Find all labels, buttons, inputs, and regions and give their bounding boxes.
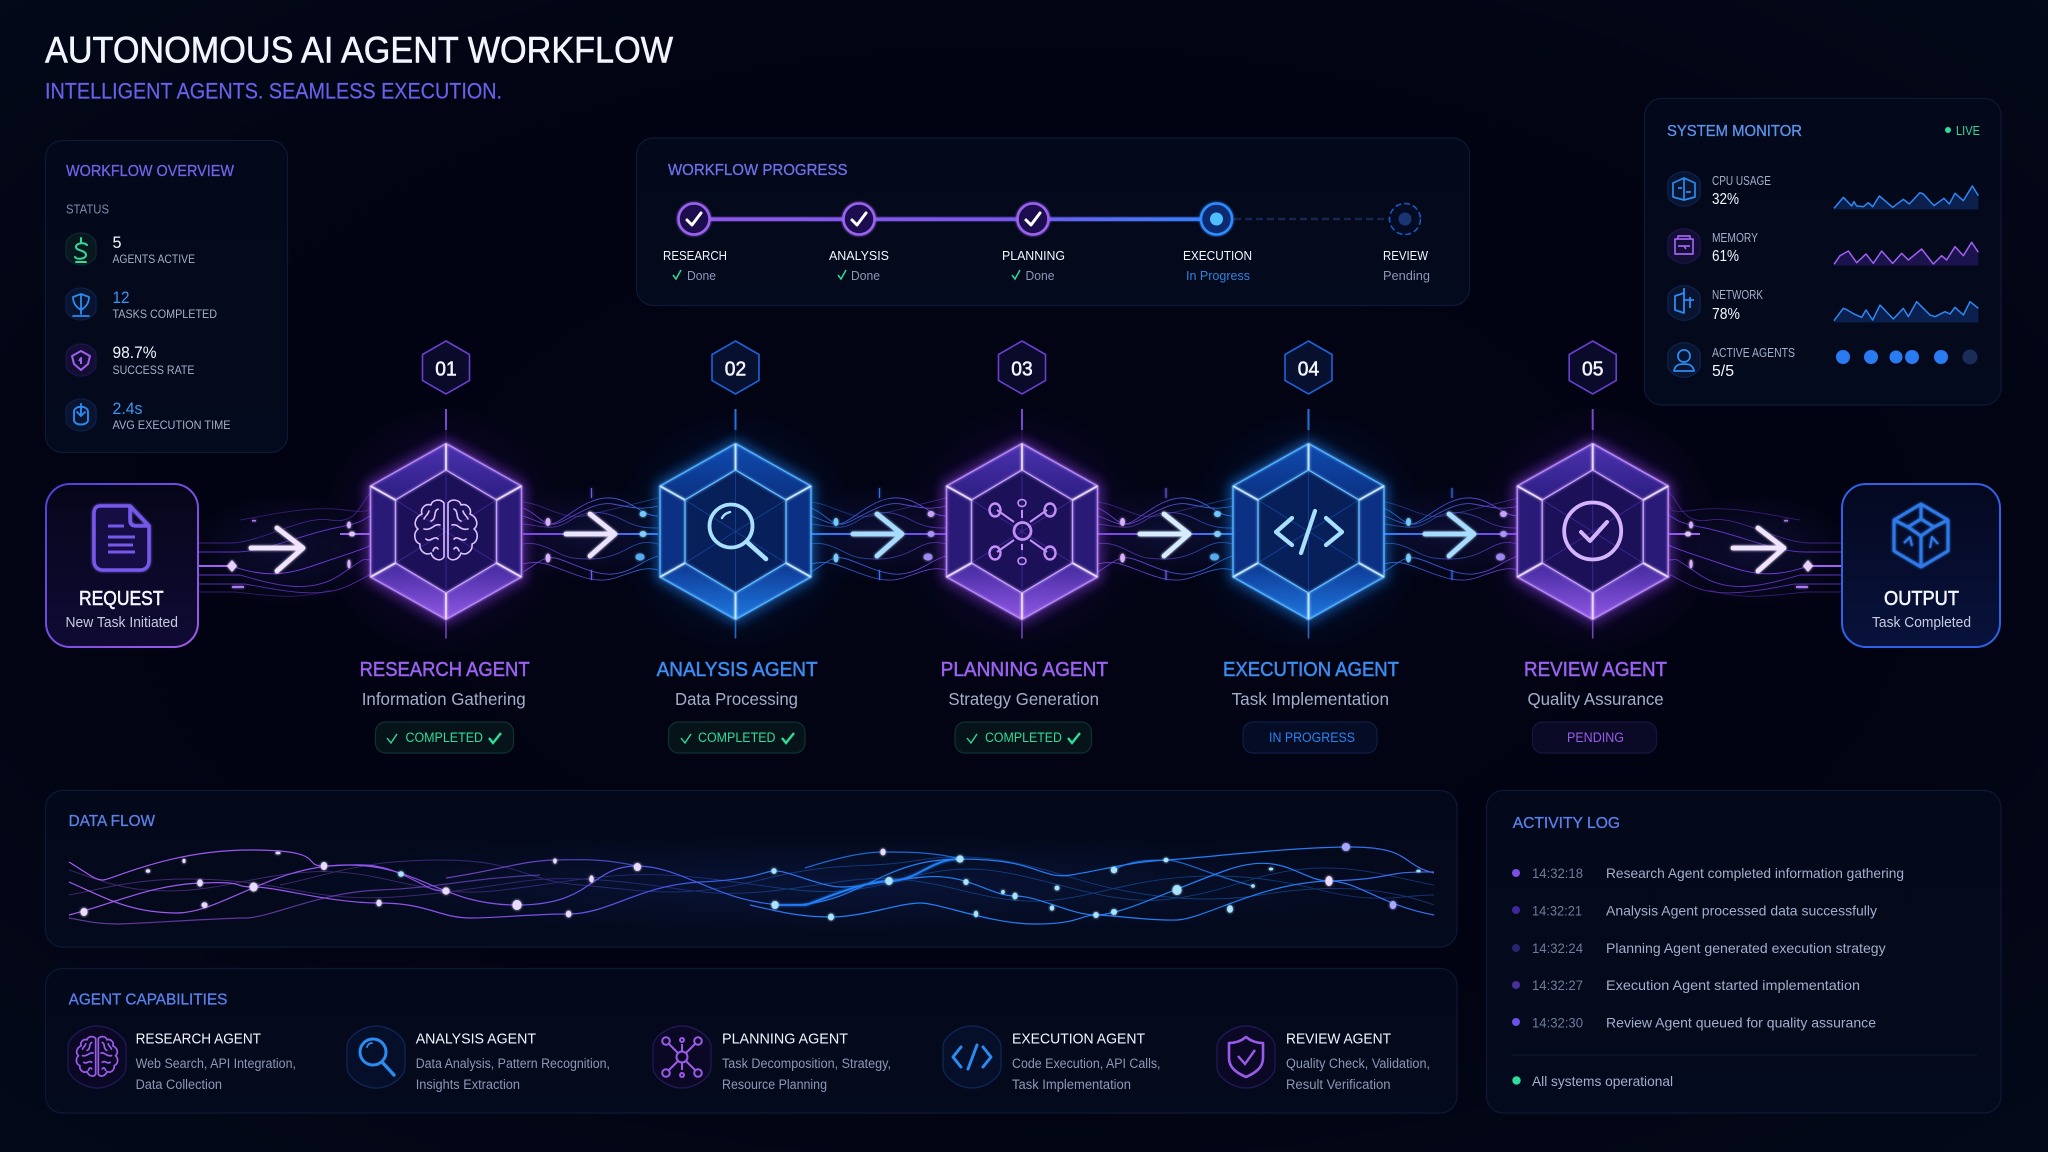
stat: success rate: SUCCESS RATE	[112, 363, 194, 377]
hexagon	[1184, 406, 1434, 656]
live indicator: LIVE	[1956, 124, 1980, 138]
metric: memory: MEMORY	[1712, 231, 1759, 245]
capability: research: Web Search, API Integration,	[136, 1056, 296, 1071]
sublabel: Task Completed	[1872, 615, 1971, 631]
metric: memory	[1668, 229, 1978, 266]
step number 03: 03	[1011, 358, 1033, 380]
status badge: COMPLETED	[698, 730, 776, 745]
icon: cube	[1894, 504, 1948, 567]
stat: success rate: 98.7%	[112, 343, 156, 362]
step number 01	[422, 341, 470, 430]
metric: memory: 61%	[1712, 248, 1739, 265]
name: EXECUTION AGENT	[1223, 659, 1399, 681]
status badge: COMPLETED	[406, 730, 483, 745]
capability: review: REVIEW AGENT	[1286, 1030, 1391, 1048]
capability: analysis: Data Analysis, Pattern Recognition,	[416, 1056, 610, 1071]
step: planning done	[1002, 204, 1065, 283]
arrow: review to output	[1733, 528, 1784, 571]
capability: planning: Task Decomposition, Strategy,	[722, 1056, 891, 1071]
role: Task Implementation	[1232, 689, 1389, 709]
status badge: PENDING	[1567, 730, 1624, 745]
arrow: planning to execution	[1140, 514, 1189, 556]
arrow: request to research	[251, 528, 303, 571]
title: AUTONOMOUS AI AGENT WORKFLOW	[45, 30, 673, 70]
status badge	[955, 722, 1092, 753]
step: execution in progress: In Progress	[1186, 268, 1250, 283]
hexagon	[610, 406, 860, 656]
step number 05	[1569, 341, 1616, 430]
status badge: COMPLETED	[985, 730, 1062, 745]
icon: brain	[415, 500, 477, 560]
panel: workflow overview	[46, 140, 288, 452]
step: analysis done: Done	[851, 268, 880, 283]
agent: research	[321, 341, 571, 753]
heading: activity log: ACTIVITY LOG	[1513, 815, 1620, 832]
name: ANALYSIS AGENT	[657, 659, 818, 681]
capability: research: Data Collection	[136, 1077, 222, 1092]
step: review pending: Pending	[1383, 268, 1430, 283]
node: request	[46, 484, 198, 647]
hexagon	[1468, 406, 1718, 656]
arrow: execution to review	[1425, 514, 1474, 556]
step number 02: 02	[725, 358, 746, 380]
agent: planning	[897, 341, 1147, 753]
flow connectors: analysis to planning	[798, 484, 958, 584]
flow connectors: research to analysis	[510, 484, 670, 584]
flow connectors: execution to review	[1370, 484, 1530, 584]
step: execution in progress	[1183, 204, 1252, 283]
panel: activity log	[1486, 790, 2001, 1113]
status badge	[1532, 722, 1656, 753]
step: research done	[663, 204, 727, 283]
capability: planning: PLANNING AGENT	[722, 1030, 848, 1048]
step: analysis done: ANALYSIS	[829, 248, 889, 263]
icon: network	[990, 500, 1056, 564]
capability: review	[1217, 1026, 1430, 1092]
icon: document	[94, 506, 149, 570]
heading: workflow overview: WORKFLOW OVERVIEW	[66, 163, 235, 180]
flow connectors: review to output	[1660, 492, 1850, 605]
panel: workflow progress	[636, 138, 1470, 306]
heading: system monitor: SYSTEM MONITOR	[1667, 123, 1802, 140]
step: planning done: PLANNING	[1002, 248, 1065, 263]
panel: agent capabilities	[46, 968, 1457, 1113]
stat: tasks completed: 12	[112, 288, 130, 307]
status badge	[1243, 722, 1377, 753]
chart: data flow streams	[68, 841, 1434, 925]
capability: execution: EXECUTION AGENT	[1012, 1030, 1145, 1048]
heading: agent capabilities: AGENT CAPABILITIES	[69, 992, 227, 1008]
capability: review: Result Verification	[1286, 1077, 1390, 1092]
capability: analysis	[347, 1026, 610, 1092]
capability: research	[68, 1026, 296, 1092]
metric: network: NETWORK	[1712, 288, 1764, 302]
subtitle: INTELLIGENT AGENTS. SEAMLESS EXECUTION.	[45, 78, 502, 104]
capability: analysis: ANALYSIS AGENT	[416, 1030, 536, 1048]
name: RESEARCH AGENT	[360, 659, 530, 681]
capability: research: RESEARCH AGENT	[136, 1030, 261, 1048]
agent: execution	[1184, 341, 1434, 753]
step: analysis done	[829, 204, 889, 283]
step number 02	[712, 341, 759, 430]
step: review pending	[1383, 204, 1430, 283]
arrow: analysis to planning	[853, 514, 902, 556]
metric: network: 78%	[1712, 306, 1740, 323]
capability: analysis: Insights Extraction	[416, 1077, 520, 1092]
name: PLANNING AGENT	[941, 659, 1108, 681]
log entry 2: 14:32:21	[1532, 902, 1582, 918]
metric: cpu usage: 32%	[1712, 191, 1739, 208]
role: Information Gathering	[362, 689, 526, 709]
log entry 3: 14:32:24	[1532, 940, 1583, 956]
stat: agents active: 5	[112, 233, 122, 252]
stat: tasks completed	[66, 288, 217, 321]
name: REVIEW AGENT	[1524, 659, 1667, 681]
log entry 1: Research Agent completed information gathering	[1606, 865, 1904, 881]
step: research done: RESEARCH	[663, 248, 727, 263]
label: status: STATUS	[66, 202, 109, 216]
capability: execution	[943, 1026, 1160, 1092]
step number 04	[1285, 341, 1332, 430]
stat: average execution time: 2.4s	[112, 399, 142, 418]
log entry 4: 14:32:27	[1532, 977, 1583, 993]
agent: review	[1468, 341, 1718, 753]
stat: agents active	[66, 233, 195, 266]
step number 05: 05	[1582, 358, 1603, 380]
metric: network	[1668, 286, 1978, 323]
capability: review: Quality Check, Validation,	[1286, 1056, 1430, 1071]
step: execution in progress: EXECUTION	[1183, 248, 1252, 263]
heading: data flow: DATA FLOW	[69, 813, 156, 830]
icon: code	[1276, 511, 1342, 553]
stat: success rate	[66, 343, 194, 377]
live indicator	[1945, 124, 1980, 138]
capability: planning: Resource Planning	[722, 1077, 827, 1092]
metric: active agents	[1668, 343, 1978, 380]
step number 03	[998, 341, 1046, 430]
status badge	[376, 722, 514, 753]
system status: All systems operational	[1532, 1073, 1673, 1089]
step: review pending: REVIEW	[1383, 248, 1429, 263]
capability: execution: Task Implementation	[1012, 1077, 1131, 1092]
status badge: IN PROGRESS	[1269, 730, 1355, 745]
log entry 2: Analysis Agent processed data successfully	[1606, 902, 1877, 918]
hexagon	[897, 406, 1147, 656]
log entry 5: Review Agent queued for quality assurance	[1606, 1014, 1876, 1030]
panel: data flow	[46, 790, 1457, 947]
icon: check circle	[1564, 502, 1621, 560]
panel: system monitor	[1644, 98, 2001, 405]
sublabel: New Task Initiated	[66, 615, 178, 631]
agent: analysis	[610, 341, 860, 753]
arrow: research to analysis	[566, 514, 615, 556]
stat: agents active: AGENTS ACTIVE	[112, 252, 195, 266]
hexagon	[321, 406, 571, 656]
log entry 4: Execution Agent started implementation	[1606, 977, 1860, 993]
metric: cpu usage: CPU USAGE	[1712, 174, 1771, 188]
log entry 3: Planning Agent generated execution strategy	[1606, 940, 1886, 956]
role: Strategy Generation	[948, 689, 1099, 709]
log entry 5: 14:32:30	[1532, 1014, 1583, 1030]
step: research done: Done	[687, 268, 716, 283]
stat: average execution time: AVG EXECUTION TIME	[112, 418, 230, 432]
flow connectors: request to research	[190, 492, 380, 605]
log entry 1: 14:32:18	[1532, 865, 1583, 881]
metric: cpu usage	[1668, 172, 1978, 209]
progress track	[700, 218, 1389, 221]
status badge	[668, 722, 805, 753]
role: Data Processing	[675, 689, 798, 709]
stat: tasks completed: TASKS COMPLETED	[112, 307, 217, 321]
capability: execution: Code Execution, API Calls,	[1012, 1056, 1160, 1071]
icon: magnifier	[710, 504, 766, 559]
label: REQUEST	[79, 588, 164, 610]
node: output	[1842, 484, 2000, 647]
capability: planning	[653, 1026, 891, 1092]
label: OUTPUT	[1884, 588, 1959, 610]
heading: workflow progress: WORKFLOW PROGRESS	[668, 162, 848, 179]
metric: active agents: ACTIVE AGENTS	[1712, 346, 1795, 360]
step number 04: 04	[1298, 358, 1319, 380]
stat: average execution time	[66, 399, 230, 432]
flow connectors: planning to execution	[1084, 484, 1244, 584]
step: planning done: Done	[1026, 268, 1054, 283]
step number 01: 01	[435, 358, 457, 380]
metric: active agents: 5/5	[1712, 363, 1734, 380]
role: Quality Assurance	[1528, 689, 1664, 709]
